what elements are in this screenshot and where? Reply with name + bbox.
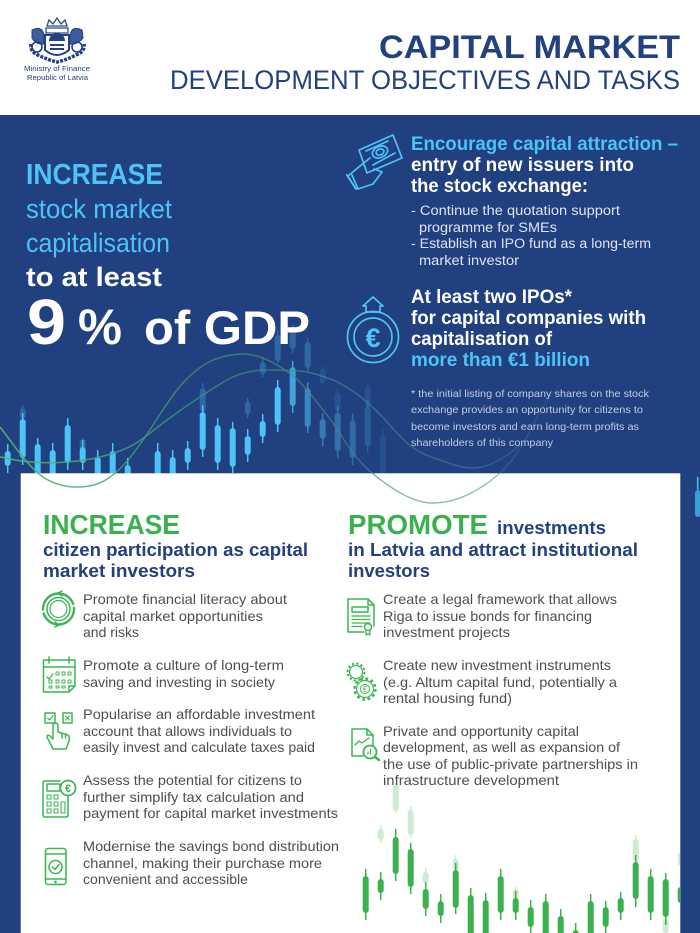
footnote bbox=[411, 388, 650, 449]
text: investment account bbox=[83, 706, 315, 755]
text: simplify tax calculation: further simplify tax calculation and bbox=[83, 789, 304, 805]
text: private and opportunity capital: infrastructure development bbox=[383, 772, 559, 788]
icon: hand pressing buttons bbox=[45, 713, 72, 749]
text: savings bond bbox=[83, 838, 339, 887]
icon: hand with banknote bbox=[347, 135, 402, 189]
text: private and opportunity capital: development, as well as expansion of bbox=[383, 739, 620, 755]
text: legal framework: Create a legal framework that allows bbox=[383, 591, 617, 607]
text: at least two IPOs: more than €1 billion bbox=[411, 350, 590, 371]
text: at least two IPOs bbox=[411, 287, 646, 371]
title: DEVELOPMENT OBJECTIVES AND TASKS bbox=[170, 65, 680, 95]
title: CAPITAL MARKET bbox=[379, 29, 680, 65]
text: at least two IPOs: for capital companies with bbox=[411, 308, 646, 329]
text: at least two IPOs: At least two IPOs* bbox=[411, 287, 573, 308]
heading: promote: investments bbox=[497, 518, 606, 538]
heading: promote: investors bbox=[348, 561, 430, 581]
trend lines bbox=[0, 354, 560, 503]
panel: increase citizen participation bbox=[43, 509, 339, 887]
text: at least two IPOs: capitalisation of bbox=[411, 329, 553, 350]
footnote: exchange provides an opportunity for citizens to bbox=[411, 404, 643, 416]
logo: Ministry of Finance crest bbox=[24, 18, 90, 82]
text: simplify tax calculation bbox=[83, 772, 338, 821]
heading: increase: market investors bbox=[43, 561, 195, 581]
heading: increase stock market capitalisation: capitalisation bbox=[26, 228, 170, 258]
heading: promote: in Latvia and attract institutional bbox=[348, 540, 638, 560]
bullet list: market investor bbox=[419, 253, 520, 268]
text: savings bond: convenient and accessible bbox=[83, 871, 248, 887]
text: legal framework bbox=[383, 591, 617, 640]
header band bbox=[0, 0, 700, 115]
panel: promote investments bbox=[348, 509, 638, 788]
text: private and opportunity capital: the use of public-private partnerships in bbox=[383, 756, 638, 772]
text: investment instruments: (e.g. Altum capital fund, potentially a bbox=[383, 674, 617, 690]
bullet list: - Continue the quotation support bbox=[411, 203, 620, 218]
text: culture of saving: saving and investing in society bbox=[83, 674, 275, 690]
heading: increase stock market capitalisation: INCREASE bbox=[26, 159, 163, 191]
heading: increase stock market capitalisation: to at least bbox=[26, 262, 162, 292]
text: investment account: account that allows individuals to bbox=[83, 723, 292, 739]
icon: smartphone with check bbox=[46, 848, 66, 884]
candlestick chart: blue bbox=[8, 361, 383, 480]
text: financial literacy: Promote financial literacy about bbox=[83, 591, 287, 607]
icon: euro coin with up arrow: € bbox=[365, 323, 381, 353]
heading: increase stock market capitalisation bbox=[26, 159, 310, 358]
text: culture of saving: Promote a culture of long-term bbox=[83, 657, 284, 673]
text: culture of saving bbox=[83, 657, 284, 690]
text: investment instruments: Create new investment instruments bbox=[383, 657, 611, 673]
text: encourage capital attraction: Encourage capital attraction – bbox=[411, 134, 678, 155]
logo caption: Ministry of Finance bbox=[24, 64, 90, 73]
text: encourage capital attraction: entry of new issuers into bbox=[411, 155, 634, 176]
bullet list bbox=[411, 203, 651, 268]
heading: promote: PROMOTE bbox=[348, 509, 488, 540]
title bbox=[170, 29, 680, 95]
footnote: become investors and earn long-term profits as bbox=[411, 421, 639, 433]
text: investment instruments: rental housing fund) bbox=[383, 690, 512, 706]
text: encourage capital attraction bbox=[411, 134, 678, 268]
text: financial literacy bbox=[83, 591, 287, 640]
fainter shadow candles bbox=[323, 366, 368, 410]
icon: chart document with magnifier bbox=[352, 729, 379, 760]
heading: increase: citizen participation as capital bbox=[43, 540, 308, 560]
text: legal framework: Riga to issue bonds for financing bbox=[383, 608, 592, 624]
text: encourage capital attraction: the stock exchange: bbox=[411, 176, 588, 197]
text: financial literacy: and risks bbox=[83, 624, 139, 640]
faint shadow candles bbox=[23, 325, 308, 450]
text: simplify tax calculation: Assess the potential for citizens to bbox=[83, 772, 302, 788]
icon: calculator with euro coin bbox=[43, 780, 76, 817]
icon: euro coin with up arrow bbox=[348, 297, 398, 362]
text: savings bond: Modernise the savings bond distribution bbox=[83, 838, 339, 854]
icon: calculator with euro coin: € bbox=[65, 783, 71, 795]
text: savings bond: channel, making their purchase more bbox=[83, 855, 322, 871]
text: financial literacy: capital market opportunities bbox=[83, 608, 263, 624]
icon: document with seal bbox=[348, 599, 374, 635]
heading: increase bbox=[43, 509, 308, 581]
white panel bbox=[21, 473, 680, 933]
bullet list: - Establish an IPO fund as a long-term bbox=[411, 236, 651, 251]
icon: calendar bbox=[44, 657, 75, 692]
heading: increase stock market capitalisation: stock market bbox=[26, 194, 172, 224]
heading: promote bbox=[348, 509, 638, 581]
icon: gears with euro bbox=[348, 664, 376, 700]
heading: increase: INCREASE bbox=[43, 509, 180, 540]
candlestick chart: green bbox=[366, 783, 681, 933]
icon: circular arrows bbox=[43, 591, 74, 627]
icon: gears with euro: € bbox=[363, 685, 368, 694]
footnote: shareholders of this company bbox=[411, 437, 554, 449]
text: legal framework: investment projects bbox=[383, 624, 510, 640]
text: investment account: Popularise an affordable investment bbox=[83, 706, 315, 722]
text: simplify tax calculation: payment for capital market investments bbox=[83, 805, 338, 821]
logo caption: Republic of Latvia bbox=[27, 73, 89, 82]
logo caption bbox=[24, 64, 90, 82]
heading: increase stock market capitalisation: of GDP bbox=[144, 301, 310, 354]
text: investment account: easily invest and calculate taxes paid bbox=[83, 739, 315, 755]
text: private and opportunity capital: Private and opportunity capital bbox=[383, 723, 579, 739]
side candle right edge bbox=[697, 477, 699, 490]
text: private and opportunity capital bbox=[383, 723, 638, 788]
footnote: * the initial listing of company shares on the stock bbox=[411, 388, 650, 400]
text: investment instruments bbox=[383, 657, 617, 706]
heading: increase stock market capitalisation: % bbox=[78, 299, 122, 355]
heading: increase stock market capitalisation: 9 bbox=[27, 286, 66, 358]
bullet list: programme for SMEs bbox=[419, 220, 557, 235]
